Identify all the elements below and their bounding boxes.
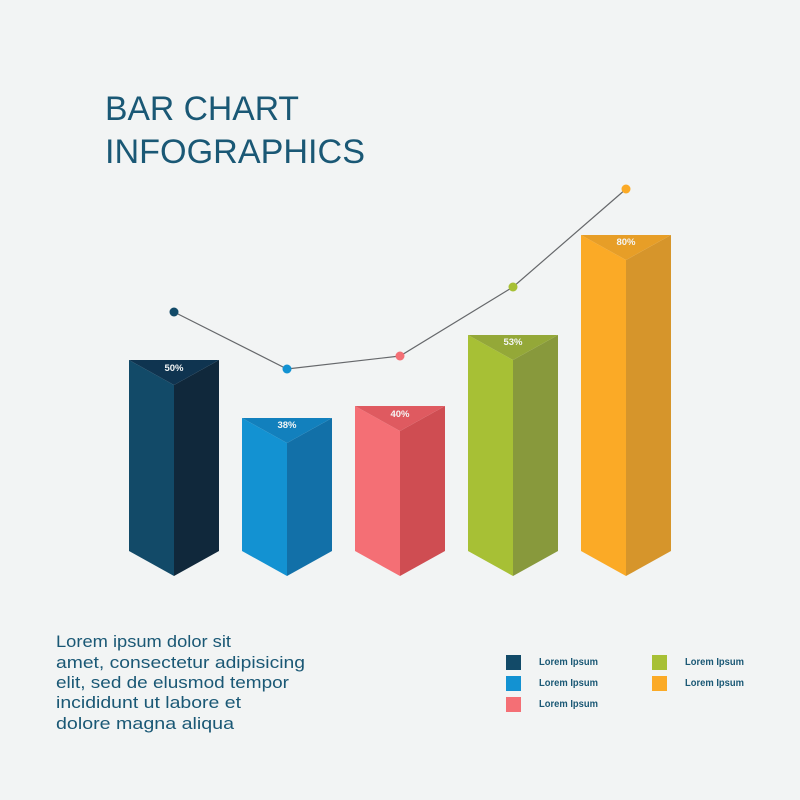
- bar: 50% navy: [129, 360, 219, 576]
- bar: 38% blue: [242, 418, 332, 576]
- bar: 53% green: [468, 335, 558, 576]
- legend item: green: Lorem Ipsum: [685, 657, 744, 668]
- legend item: orange: Lorem Ipsum: [685, 678, 744, 689]
- legend item: navy: Lorem Ipsum: [539, 657, 598, 668]
- bar: 50% navy: 50%: [164, 363, 184, 374]
- title: [105, 90, 365, 171]
- body text: incididunt ut labore et: [56, 693, 241, 712]
- legend item: blue: Lorem Ipsum: [539, 678, 598, 689]
- body text: Lorem ipsum dolor sit: [56, 632, 231, 651]
- legend item: orange: [652, 676, 744, 691]
- body text: amet, consectetur adipisicing: [56, 653, 305, 672]
- body text: dolore magna aliqua: [56, 714, 235, 733]
- bar: 80% orange: 80%: [616, 237, 636, 248]
- legend item: coral: [506, 697, 598, 712]
- legend: [506, 655, 744, 712]
- title: INFOGRAPHICS: [105, 133, 365, 171]
- bar: 80% orange: [581, 235, 671, 576]
- bar: 38% blue: 38%: [277, 420, 297, 431]
- bar: 40% coral: 40%: [390, 409, 410, 420]
- line chart with markers: [170, 184, 630, 374]
- body text: elit, sed de elusmod tempor: [56, 673, 289, 692]
- legend item: green: [652, 655, 744, 670]
- title: BAR CHART: [105, 90, 299, 128]
- legend item: coral: Lorem Ipsum: [539, 699, 598, 710]
- bar: 40% coral: [355, 406, 445, 576]
- legend item: navy: [506, 655, 598, 670]
- body text: [56, 632, 305, 733]
- legend item: blue: [506, 676, 598, 691]
- bar chart: [129, 235, 671, 576]
- bar: 53% green: 53%: [503, 337, 523, 348]
